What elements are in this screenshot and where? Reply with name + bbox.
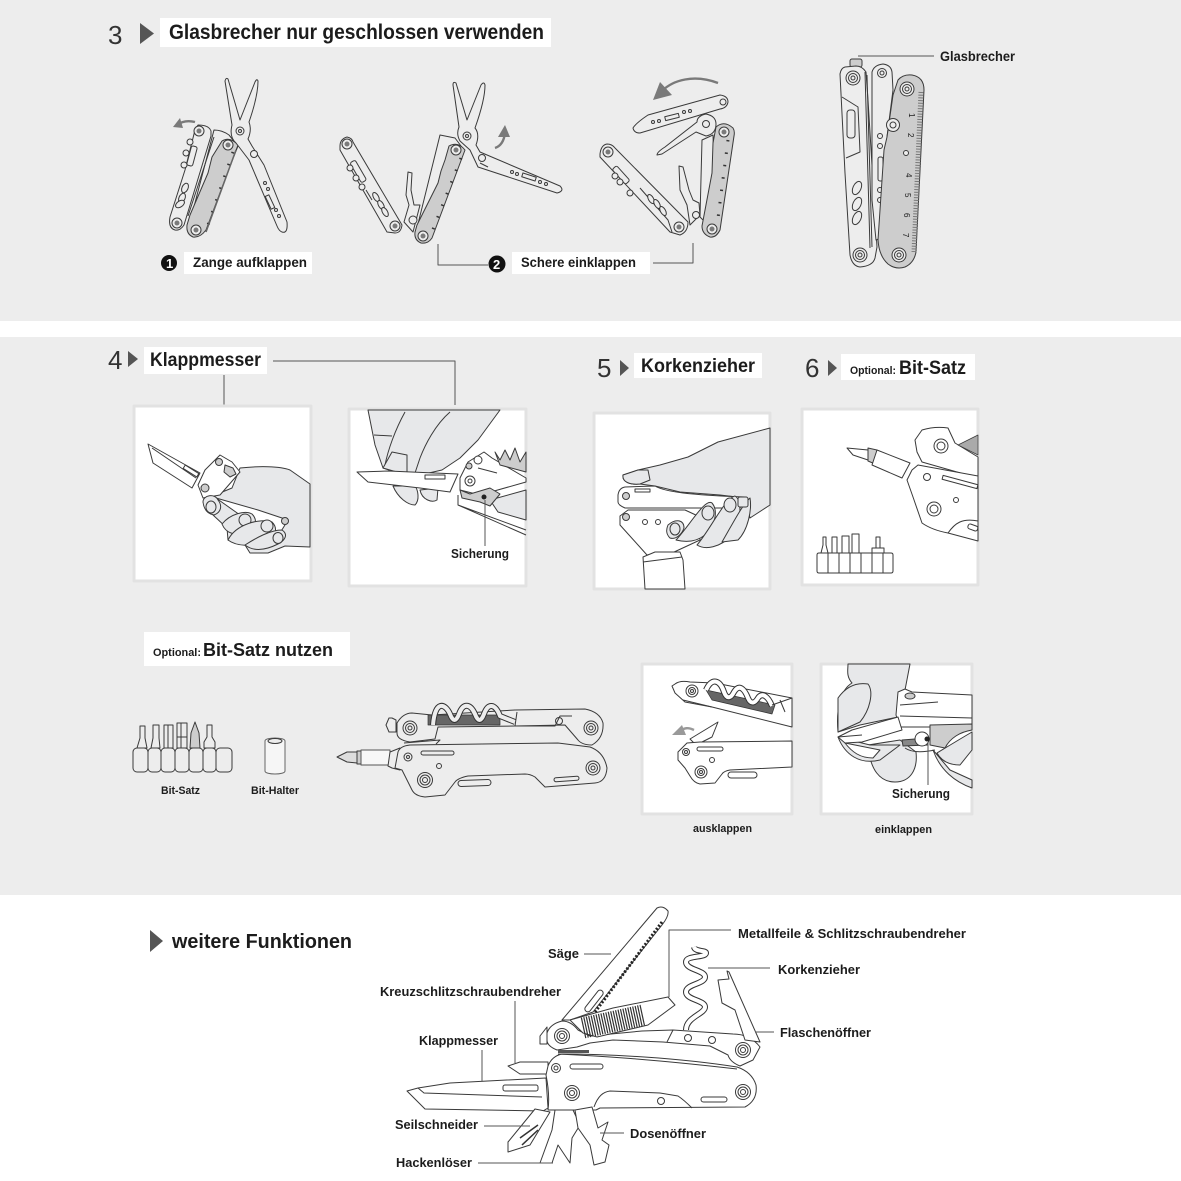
illustration: closed tool front view with ruler: 5 (903, 193, 912, 198)
heading: Optional Bit-Satz nutzen: Optional: (153, 647, 201, 659)
heading: step 6 Optional Bit-Satz: Bit-Satz (899, 358, 966, 379)
label: Bit-Halter: Bit-Halter (251, 785, 300, 797)
callout: Glasbrecher: Glasbrecher (940, 48, 1015, 64)
panel: bit set and holder (802, 409, 978, 585)
heading: step 6 Optional Bit-Satz: 6 (805, 353, 819, 383)
label: Bit-Satz: Bit-Satz (161, 785, 200, 797)
illustration: closed tool front view with ruler: 7 (901, 233, 910, 238)
callout: Korkenzieher: Korkenzieher (778, 962, 860, 977)
illustration: pliers opened with arrow (170, 78, 287, 237)
callout: Säge: Säge (548, 946, 579, 961)
step label: Schere einklappen with bracket: 2 (493, 257, 500, 272)
illustration: closed tool front view with ruler: 2 (906, 133, 915, 138)
label: ausklappen: ausklappen (693, 823, 752, 835)
heading: step 4 Klappmesser: Klappmesser (150, 350, 262, 371)
heading: step 5 Korkenzieher: Korkenzieher (641, 356, 756, 377)
icon: bit holder (265, 738, 285, 774)
heading: Optional Bit-Satz nutzen: Bit-Satz nutzen (203, 639, 333, 660)
heading: step 3: 3 (108, 20, 122, 50)
illustration: tool with bit attached (337, 706, 607, 797)
illustration: scissors folded back with arrow (600, 79, 734, 237)
illustration: tool with all functions (407, 907, 760, 1165)
heading: step 4 Klappmesser: 4 (108, 345, 122, 375)
heading: step 6 Optional Bit-Satz: Optional: (850, 365, 896, 377)
heading: step 4 Klappmesser (108, 345, 455, 405)
label: einklappen: einklappen (875, 824, 932, 836)
callout: Kreuzschlitzschraubendreher: Kreuzschlitzschraubendreher (380, 984, 561, 999)
panel: closing the knife with safety lock (349, 409, 526, 586)
illustration: scissors being folded (340, 82, 562, 243)
illustration: closed tool front view with ruler: 1 (907, 113, 916, 118)
callout: Seilschneider (395, 1117, 530, 1132)
heading: weitere Funktionen: weitere Funktionen (171, 931, 352, 953)
heading: step 5 Korkenzieher (597, 353, 762, 383)
step label: Zange aufklappen: Zange aufklappen (193, 255, 307, 270)
heading: step 3: Glasbrecher nur geschlossen verwenden (169, 21, 544, 44)
step label: Zange aufklappen: 1 (166, 256, 173, 271)
callout: Metallfeile und Schlitzschraubendreher (669, 926, 966, 997)
heading: step 6 Optional Bit-Satz (805, 353, 975, 383)
callout: Säge (548, 946, 611, 961)
callout: Metallfeile und Schlitzschraubendreher: Metallfeile & Schlitzschraubendreher (738, 926, 966, 941)
icon: bit set (133, 722, 232, 772)
heading: Optional Bit-Satz nutzen (144, 632, 350, 666)
panel: einklappen with safety lock: Sicherung (892, 786, 950, 801)
illustration: closed tool front view with ruler: 6 (902, 213, 911, 218)
panel: corkscrew in use (594, 413, 770, 589)
panel: closing the knife with safety lock: Sicherung (451, 546, 509, 561)
panel: opening the knife (134, 406, 311, 581)
heading: step 3 (108, 18, 551, 50)
callout: Klappmesser (419, 1033, 498, 1081)
callout: Hackenlöser: Hackenlöser (396, 1155, 472, 1170)
step label: Zange aufklappen (161, 252, 312, 274)
illustration: closed tool front view with ruler (840, 59, 924, 268)
callout: Dosenöffner: Dosenöffner (630, 1126, 706, 1141)
callout: Flaschenöffner: Flaschenöffner (780, 1025, 871, 1040)
callout: Seilschneider: Seilschneider (395, 1117, 478, 1132)
panel: ausklappen (642, 664, 792, 814)
heading: step 5 Korkenzieher: 5 (597, 353, 611, 383)
panel: einklappen with safety lock (821, 664, 972, 814)
step label: Schere einklappen with bracket: Schere einklappen (521, 255, 636, 270)
step label: Schere einklappen with bracket (438, 243, 693, 274)
illustration: closed tool front view with ruler: 4 (904, 173, 913, 178)
callout: Klappmesser: Klappmesser (419, 1033, 498, 1048)
